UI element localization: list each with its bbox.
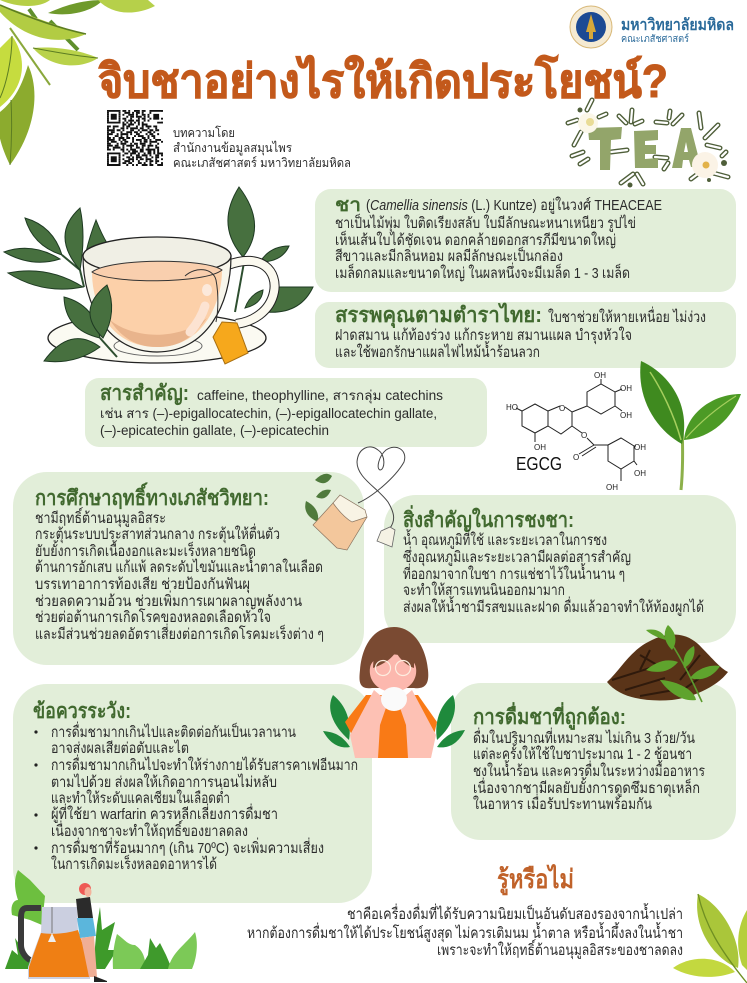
compounds heading: สารสำคัญ:	[100, 382, 189, 406]
studies text: ช่วยลดความอ้วน ช่วยเพิ่มการเผาผลาญพลังงาน	[35, 590, 302, 610]
precautions bullet list: ผู้ที่ใช้ยา warfarin ควรหลีกเลี่ยงการดื่มชา	[51, 803, 278, 823]
illustration: pile of dried tea with green sprig	[607, 625, 728, 702]
panel: important points in brewing	[384, 495, 736, 643]
chart: EGCG chemical structure: OH	[594, 371, 606, 380]
compounds text: เช่น สาร (–)-epigallocatechin, (–)-epigallocatechin gallate,	[100, 406, 437, 421]
chart: EGCG chemical structure: OH	[634, 443, 646, 452]
compounds text: (–)-epicatechin gallate, (–)-epicatechin	[100, 423, 329, 438]
panel: pharmacological studies	[13, 472, 364, 665]
did you know text: เพราะจะทำให้ฤทธิ์ต้านอนุมูลอิสระของชาลดลง	[437, 939, 683, 960]
compounds text	[100, 388, 443, 438]
studies text: และมีส่วนช่วยลดอัตราเสี่ยงต่อการเกิดโรคมะเร็งต่าง ๆ	[35, 623, 324, 643]
decoration: lime leaves top-left	[0, 0, 155, 165]
decoration: lime leaves bottom-right	[673, 894, 747, 983]
illustration: woman sipping tea	[323, 627, 465, 758]
chart: EGCG chemical structure: OH	[620, 411, 632, 420]
chart: EGCG chemical structure	[506, 371, 646, 492]
precautions bullet list: เนื่องจากชาจะทำให้ฤทธิ์ของยาลดลง	[51, 820, 248, 840]
author credit: บทความโดย	[173, 125, 235, 140]
tea heading and botanical name: (Camellia sinensis (L.) Kuntze) อยู่ในวงศ์ THEACEAE	[366, 196, 662, 214]
heading: did you know: รู้หรือไม่	[497, 863, 574, 896]
brewing text: จะทำให้สารแทนนินออกมามาก	[403, 581, 565, 599]
author credit: สำนักงานข้อมูลสมุนไพร	[173, 141, 292, 156]
studies text: ช่วยต่อต้านการเกิดโรคของหลอดเลือดหัวใจ	[35, 608, 271, 626]
chart: EGCG chemical structure: OH	[634, 469, 646, 478]
EGCG label: EGCG	[516, 454, 562, 474]
brewing text: ที่ออกมาจากใบชา การแช่ชาไว้ในน้ำนาน ๆ	[403, 563, 625, 583]
chart: EGCG chemical structure: O	[573, 453, 579, 462]
drinking text: แต่ละครั้งให้ใช้ใบชาประมาณ 1 - 2 ช้อนชา	[473, 743, 692, 763]
logo: Mahidol University: คณะเภสัชศาสตร์	[621, 33, 690, 45]
studies text: บรรเทาอาการท้องเสีย ช่วยป้องกันฟันผุ	[35, 576, 250, 594]
illustration: tea cup with leaves	[4, 187, 313, 364]
precautions bullet list: ตามไปด้วย ส่งผลให้เกิดอาการนอนไม่หลับ	[51, 773, 277, 791]
icon: TEA lettering with leaves	[568, 100, 728, 188]
brewing text: น้ำ อุณหภูมิที่ใช้ และระยะเวลาในการชง	[403, 529, 607, 550]
tea description text: สีขาวและมีกลิ่นหอม ผลมีลักษณะเป็นกล่อง	[335, 245, 563, 265]
studies text: ยับยั้งการเกิดเนื้องอกและมะเร็งหลายชนิด	[35, 540, 256, 560]
brewing heading: สิ่งสำคัญในการชงชา:	[403, 504, 574, 533]
properties text: ฝาดสมาน แก้ท้องร่วง แก้กระหาย สมานแผล บำรุงหัวใจ	[335, 326, 632, 345]
studies text: ชามีฤทธิ์ต้านอนุมูลอิสระ	[35, 507, 166, 528]
chart: EGCG chemical structure: OH	[534, 443, 546, 452]
tea description text: ชาเป็นไม้พุ่ม ใบติดเรียงสลับ ใบมีลักษณะหนาเหนียว รูปไข่	[335, 213, 636, 233]
did you know text	[247, 903, 683, 960]
properties text: ใบชาช่วยให้หายเหนื่อย ไม่ง่วง	[548, 306, 706, 326]
drinking text: เนื่องจากชามีผลยับยั้งการดูดซึมธาตุเหล็ก	[473, 777, 700, 798]
properties text: และใช้พอกรักษาแผลไฟไหม้น้ำร้อนลวก	[335, 341, 540, 361]
studies text	[35, 507, 324, 643]
logo: Mahidol University: มหาวิทยาลัยมหิดล	[621, 16, 734, 34]
QR code	[107, 111, 163, 165]
panel: correct way to drink tea	[451, 683, 736, 840]
precautions bullet list: การดื่มชามากเกินไปและติดต่อกันเป็นเวลานาน	[51, 721, 296, 741]
drinking text: ดื่มในปริมาณที่เหมาะสม ไม่เกิน 3 ถ้วย/วัน	[473, 727, 695, 747]
precautions bullet list: อาจส่งผลเสียต่อตับและไต	[51, 739, 189, 757]
panel: key compounds	[85, 378, 487, 447]
illustration: woman leaning on teapot with plants	[5, 870, 197, 982]
tea description text	[335, 213, 636, 282]
illustration: tea bag with heart-shaped string	[305, 447, 405, 550]
studies text: กระตุ้นระบบประสาทส่วนกลาง กระตุ้นให้ตื่นตัว	[35, 523, 280, 544]
compounds text: caffeine, theophylline, สารกลุ่ม catechins	[197, 388, 443, 404]
studies text: ต้านการอักเสบ แก้แพ้ ลดระดับไขมันและน้ำตาลในเลือด	[35, 556, 323, 576]
properties text	[335, 306, 706, 361]
author credit	[173, 125, 351, 170]
drinking heading: การดื่มชาที่ถูกต้อง:	[473, 701, 626, 731]
tea heading and botanical name	[335, 195, 662, 216]
studies heading: การศึกษาฤทธิ์ทางเภสัชวิทยา:	[35, 482, 269, 510]
title: จิบชาอย่างไรให้เกิดประโยชน์?	[98, 54, 668, 107]
tea description text: เมล็ดกลมและขนาดใหญ่ ในผลหนึ่งจะมีเมล็ด 1 - 3 เมล็ด	[335, 262, 630, 282]
precautions bullet list: การดื่มชาที่ร้อนมากๆ (เกิน 70ºC) จะเพิ่มความเสี่ยง	[51, 837, 324, 857]
brewing text	[403, 529, 704, 616]
logo: Mahidol University	[570, 6, 734, 48]
chart: EGCG chemical structure: O	[559, 404, 565, 413]
panel: Thai pharmacopoeia properties	[315, 302, 736, 368]
brewing text: ซึ่งอุณหภูมิและระยะเวลามีผลต่อสารสำคัญ	[403, 546, 631, 567]
chart: EGCG chemical structure: OH	[606, 483, 618, 492]
did you know text: ชาคือเครื่องดื่มที่ได้รับความนิยมเป็นอันดับสองรองจากน้ำเปล่า	[347, 903, 683, 923]
precautions heading: ข้อควรระวัง:	[33, 699, 131, 723]
tea description text: เห็นเส้นใบได้ชัดเจน ดอกคล้ายดอกสารภีมีขนาดใหญ่	[335, 230, 616, 249]
panel: tea description	[315, 189, 736, 292]
precautions bullet list: การดื่มชามากเกินไปจะทำให้ร่างกายได้รับสารคาเฟอีนมาก	[51, 754, 358, 774]
chart: EGCG chemical structure: HO	[506, 403, 518, 412]
drinking text: ในอาหาร เมื่อรับประทานพร้อมกัน	[473, 793, 652, 813]
tea heading and botanical name: ชา	[335, 195, 361, 216]
chart: EGCG chemical structure: OH	[620, 384, 632, 393]
precautions bullet list: และทำให้ระดับแคลเซียมในเลือดต่ำ	[51, 787, 230, 807]
chart: EGCG chemical structure: O	[581, 431, 587, 440]
author credit: คณะเภสัชศาสตร์ มหาวิทยาลัยมหิดล	[173, 156, 351, 170]
illustration: fresh tea shoot	[640, 361, 741, 490]
precautions bullet list: ในการเกิดมะเร็งหลอดอาหารได้	[51, 854, 217, 873]
precautions bullet list	[34, 721, 358, 873]
panel: precautions	[13, 684, 372, 903]
properties heading: สรรพคุณตามตำราไทย:	[335, 302, 542, 329]
drinking text	[473, 727, 705, 813]
